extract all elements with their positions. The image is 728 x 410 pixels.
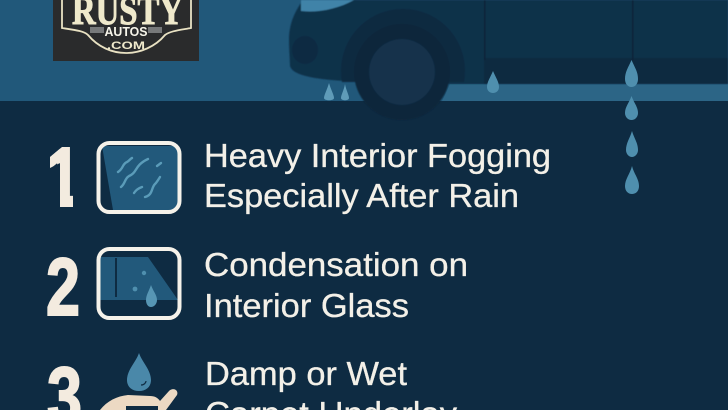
condensation dot upper: [142, 271, 146, 275]
fog streaks: [118, 158, 161, 197]
icon drop: [146, 285, 157, 307]
headlight: [292, 36, 318, 64]
falling drops: [625, 60, 639, 194]
windshield: [301, 0, 354, 12]
logo right bar: [148, 27, 162, 33]
road strip: [442, 84, 728, 101]
line 1: Heavy Interior Fogging: [204, 137, 551, 174]
line 1: Damp or Wet: [205, 355, 407, 392]
drop 1: [625, 60, 638, 87]
side glass: [100, 257, 178, 300]
water drop: [127, 353, 151, 391]
logo left bar: [90, 27, 104, 33]
icon: water drop over hand: [100, 353, 177, 410]
hub: [369, 39, 435, 105]
small drip right: [341, 84, 349, 100]
illustration: car: [289, 0, 728, 120]
condensation dot lower: [133, 287, 137, 291]
line 2: Especially After Rain: [204, 177, 519, 214]
logo: Rusty Autos: [53, 0, 199, 61]
logo badge outline: [62, 0, 191, 53]
water drop under door: [487, 71, 499, 93]
line 1: Condensation on: [204, 246, 468, 283]
tyre: [354, 24, 450, 120]
drop highlight: [141, 381, 146, 385]
wheel arch: [341, 9, 465, 82]
item 2 number: 2: [46, 242, 80, 333]
item 2 heading: [204, 246, 468, 324]
item 1 number: 1: [44, 131, 80, 225]
hand shadow: [126, 406, 158, 410]
panel: top banner background: [0, 0, 728, 101]
window pillar: [115, 258, 117, 297]
drop 3: [626, 131, 638, 157]
logo subword: AUTOS: [104, 24, 148, 39]
item 3 heading: [205, 355, 458, 410]
drop 4: [625, 166, 639, 194]
panel: lower dark background: [0, 101, 728, 410]
icon frame: [98, 143, 180, 212]
icon frame: [98, 249, 180, 318]
icon: foggy window: [98, 143, 180, 212]
logo background: [53, 0, 199, 61]
logo domain: .COM: [107, 40, 145, 52]
window glass: [102, 146, 178, 210]
hand: [100, 389, 177, 410]
lower door band: [484, 58, 728, 84]
small drip left: [324, 83, 334, 100]
item 1 heading: [204, 137, 551, 214]
drop 2: [625, 96, 638, 120]
door line rear: [632, 0, 634, 60]
line 2: Interior Glass: [204, 287, 409, 324]
icon: condensation on side window: [98, 249, 180, 318]
door line front: [484, 0, 486, 60]
car body: [289, 0, 728, 84]
